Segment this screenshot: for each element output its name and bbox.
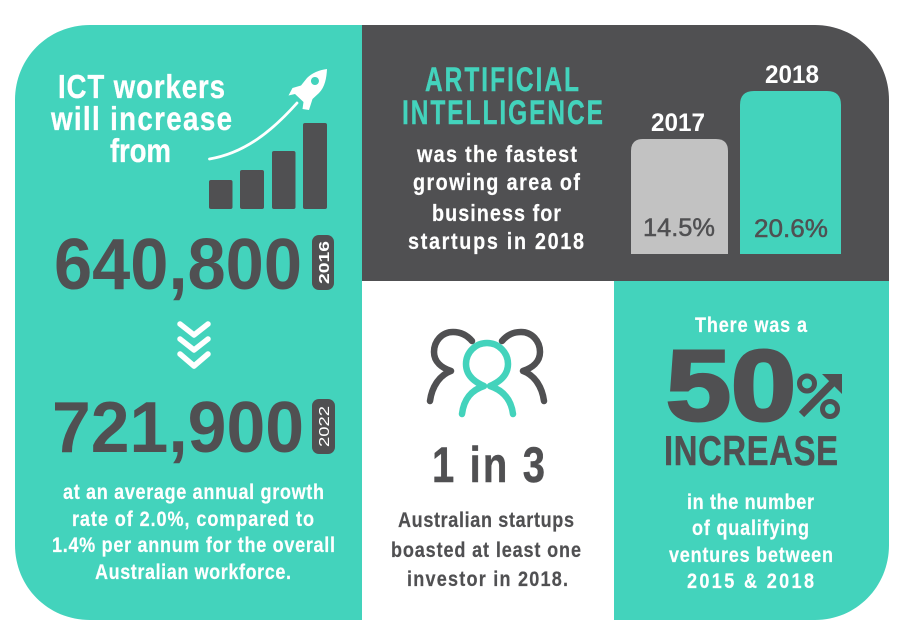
text: investor share: Australian startups bbox=[398, 509, 574, 532]
text: qualifying ventures: of qualifying bbox=[692, 517, 809, 540]
icon: down chevrons bbox=[180, 324, 208, 366]
text: growth rate comparison: rate of 2.0%, compared to bbox=[72, 508, 314, 531]
chart: 2017 bar bbox=[631, 109, 728, 254]
heading: ICT workers will increase from: from bbox=[110, 133, 171, 170]
stat: 1 in 3: 1 in 3 bbox=[432, 437, 545, 493]
text: qualifying ventures: 2015 & 2018 bbox=[687, 570, 814, 593]
panel: artificial intelligence bbox=[362, 25, 889, 281]
text: qualifying ventures: in the number bbox=[687, 491, 814, 514]
stat: 640,800 in 2016: 2016 bbox=[316, 241, 333, 284]
text: fastest growing area: business for bbox=[432, 201, 562, 226]
text: fastest growing area: growing area of bbox=[413, 170, 581, 195]
text: investor share: boasted at least one bbox=[391, 539, 581, 562]
heading: artificial intelligence bbox=[402, 61, 603, 132]
stat label: increase: INCREASE bbox=[664, 427, 838, 474]
stat: 721,900 in 2022: 2022 bbox=[316, 406, 333, 447]
heading: ICT workers will increase from: will increase bbox=[50, 101, 232, 138]
text: fastest growing area: startups in 2018 bbox=[408, 229, 584, 254]
chart: 2018 bar bbox=[740, 61, 841, 254]
text: fastest growing area bbox=[408, 142, 584, 254]
text: growth rate comparison: at an average annual growth bbox=[63, 481, 324, 504]
stat: 50 percent bbox=[666, 330, 842, 442]
heading: artificial intelligence: INTELLIGENCE bbox=[402, 94, 603, 132]
panel: ICT workers bbox=[15, 25, 362, 620]
heading: ICT workers will increase from bbox=[50, 69, 232, 170]
panel: 50% increase bbox=[614, 281, 889, 620]
heading: artificial intelligence: ARTIFICIAL bbox=[425, 61, 579, 99]
text: fastest growing area: was the fastest bbox=[416, 142, 577, 167]
text: investor share bbox=[391, 509, 581, 591]
text: qualifying ventures: ventures between bbox=[669, 544, 833, 567]
text: growth rate comparison bbox=[52, 481, 335, 584]
chart: 2018 bar: 2018 bbox=[765, 61, 819, 89]
text: growth rate comparison: 1.4% per annum for the overall bbox=[52, 534, 335, 557]
stat: 721,900 in 2022: 721,900 bbox=[52, 388, 304, 468]
icon: percent arrow bbox=[800, 374, 842, 416]
heading: ICT workers will increase from: ICT workers bbox=[58, 69, 225, 106]
chart: 2017 bar: 14.5% bbox=[643, 214, 715, 242]
text: qualifying ventures bbox=[669, 491, 833, 593]
chart: 2018 bar: 20.6% bbox=[754, 215, 828, 243]
icon: three people bbox=[430, 332, 544, 414]
text: there was a: There was a bbox=[695, 314, 808, 337]
stat: 640,800 in 2016: 640,800 bbox=[54, 225, 302, 305]
text: investor share: investor in 2018. bbox=[407, 568, 568, 591]
icon: bar chart with rocket bbox=[209, 69, 327, 209]
text: growth rate comparison: Australian workforce. bbox=[95, 561, 291, 584]
panel: 1 in 3 startups bbox=[391, 332, 581, 591]
chart: 2017 bar: 2017 bbox=[651, 109, 705, 137]
stat: 50 percent: 50 bbox=[666, 330, 796, 442]
